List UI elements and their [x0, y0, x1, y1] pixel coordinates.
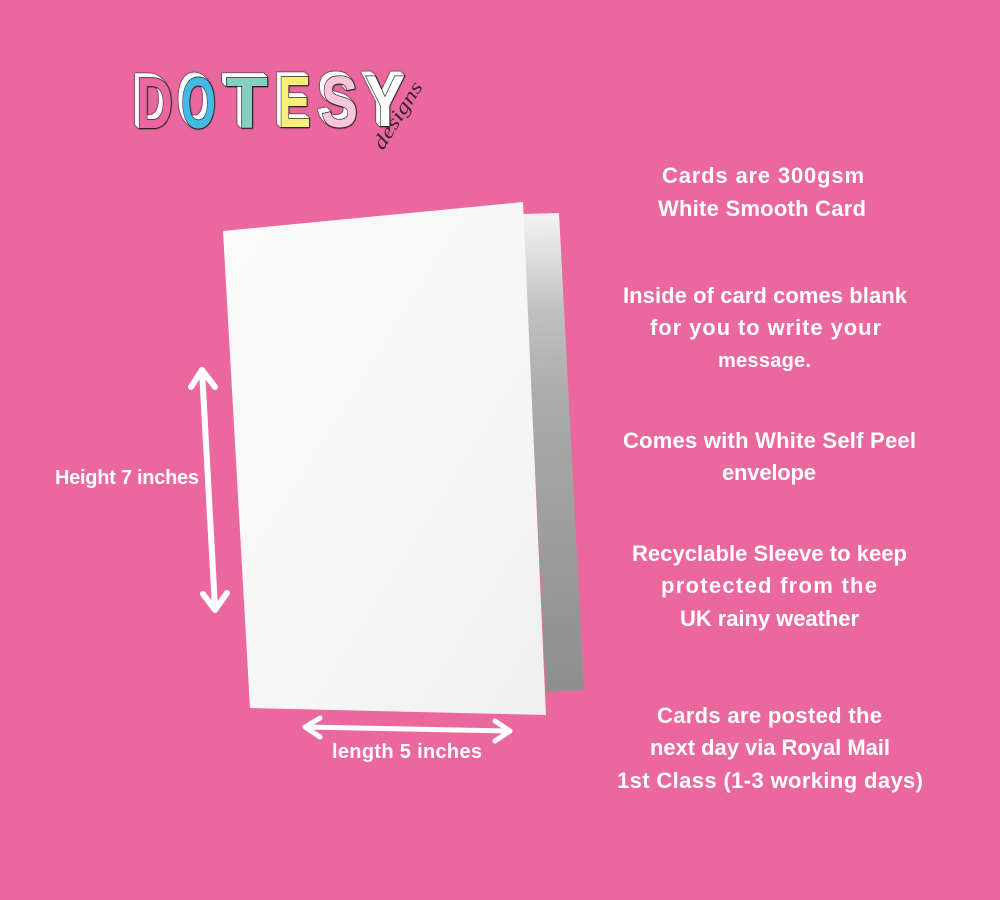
text block: postage: next day via Royal Mail	[650, 735, 890, 760]
height label: Height 7 inches	[55, 467, 199, 489]
logo: Dotesy Designs: T	[226, 64, 268, 144]
logo: Dotesy Designs: designs	[369, 77, 428, 154]
text block: inside blank: Inside of card comes blank	[623, 283, 908, 308]
text block: envelope: Comes with White Self Peel	[623, 428, 916, 453]
height arrow	[191, 370, 227, 610]
text block: inside blank	[623, 283, 908, 372]
length label: length 5 inches	[332, 741, 482, 763]
card back panel	[523, 213, 584, 692]
logo: Dotesy Designs: D	[136, 64, 173, 144]
text block: inside blank: message.	[718, 350, 811, 372]
text block: envelope	[623, 428, 916, 485]
text block: card stock	[658, 163, 866, 221]
length arrow	[305, 718, 510, 741]
greeting card	[223, 202, 584, 715]
text block: sleeve: Recyclable Sleeve to keep	[632, 541, 907, 566]
text block: sleeve	[632, 541, 907, 631]
logo: Dotesy Designs: S	[321, 63, 358, 143]
logo: Dotesy Designs: Y	[365, 62, 405, 142]
text block: sleeve: UK rainy weather	[680, 606, 859, 631]
text block: sleeve: protected from the	[661, 573, 877, 598]
text block: card stock: Cards are 300gsm	[662, 163, 864, 188]
logo: Dotesy Designs	[136, 62, 428, 154]
logo: Dotesy Designs: O	[181, 64, 216, 144]
text block: envelope: envelope	[722, 460, 816, 485]
text block: card stock: White Smooth Card	[658, 196, 866, 221]
text block: postage: Cards are posted the	[657, 703, 882, 728]
text block: postage	[617, 703, 923, 793]
logo: Dotesy Designs: E	[278, 63, 311, 143]
text block: inside blank: for you to write your	[650, 315, 881, 340]
card front panel	[223, 202, 546, 715]
text block: postage: 1st Class (1-3 working days)	[617, 768, 923, 793]
